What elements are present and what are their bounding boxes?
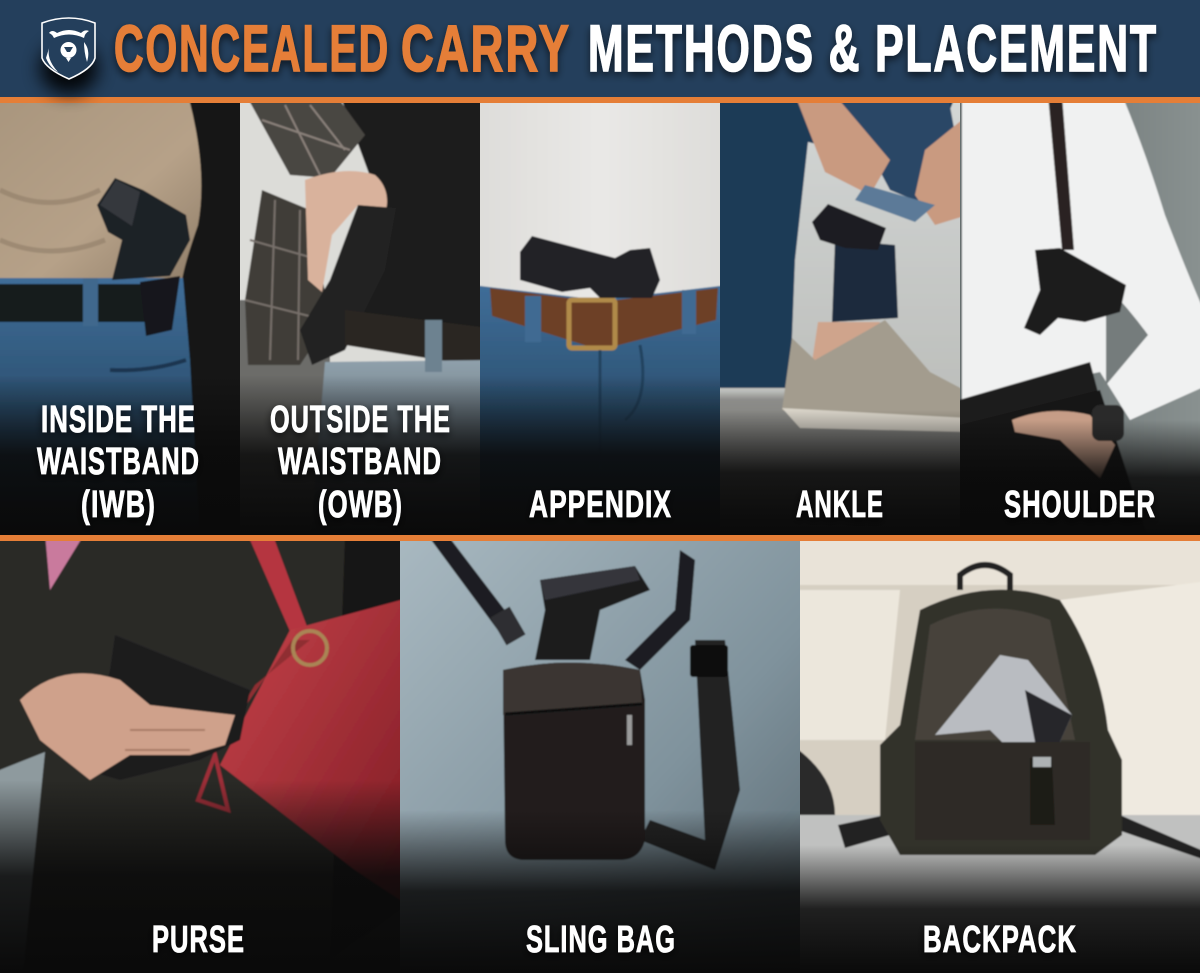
photo: backpack with gun — [792, 533, 1200, 973]
title — [114, 11, 1158, 85]
label: ankle: ANKLE — [796, 484, 884, 526]
photo: shoulder holster — [960, 103, 1200, 508]
panel: shoulder — [952, 95, 1200, 543]
label: inside the waistband — [37, 399, 200, 526]
icon: logo shadow — [40, 42, 98, 94]
middle divider — [0, 535, 1200, 541]
label: inside the waistband: INSIDE THE — [41, 399, 196, 441]
panel: backpack — [792, 533, 1200, 973]
label: sling bag: SLING BAG — [526, 919, 676, 961]
panel: ankle — [712, 95, 968, 543]
label: outside the waistband: OUTSIDE THE — [270, 399, 451, 441]
label: inside the waistband: (IWB) — [81, 484, 156, 526]
photo: gun on belt holster — [240, 103, 480, 485]
title: CARRY — [401, 11, 571, 85]
header band — [0, 0, 1200, 103]
icon: bear shield logo — [42, 18, 95, 79]
panel: outside the waistband — [232, 95, 488, 543]
label: outside the waistband — [270, 399, 451, 526]
photo: sling bag with gun — [400, 541, 800, 940]
photo: gun in waistband — [0, 103, 240, 474]
label: backpack: BACKPACK — [923, 919, 1077, 961]
panel: inside the waistband — [0, 95, 248, 543]
panel: appendix — [472, 95, 728, 543]
label: purse: PURSE — [152, 919, 245, 961]
title: CONCEALED — [114, 11, 390, 85]
photo: purse with gun — [0, 541, 400, 932]
photo: gun at appendix position — [480, 103, 720, 474]
panel: sling bag — [392, 533, 808, 973]
label: outside the waistband: WAISTBAND — [278, 441, 442, 483]
label: inside the waistband: WAISTBAND — [37, 441, 200, 483]
panel: purse — [0, 533, 408, 973]
photo: ankle holster — [720, 103, 960, 495]
label: outside the waistband: (OWB) — [318, 484, 403, 526]
label: appendix: APPENDIX — [529, 484, 672, 526]
